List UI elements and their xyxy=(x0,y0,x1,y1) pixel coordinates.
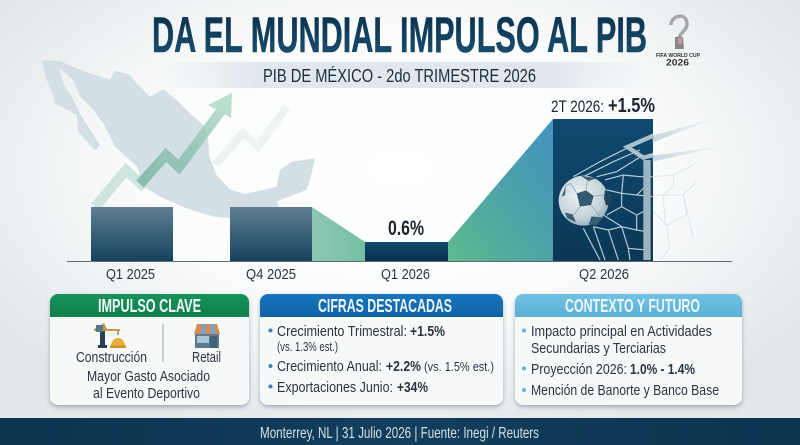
value 2T 2026 +1.5% xyxy=(551,95,655,117)
text: al evento deportivo: al Evento Deportivo xyxy=(93,385,200,402)
bullet: proyección 2026: 1.0% - 1.4% xyxy=(630,361,695,378)
bullet: crecimiento trimestral xyxy=(268,323,445,354)
footer xyxy=(0,418,800,445)
bullet: crecimiento anual: (vs. 1.5% est.) xyxy=(424,359,494,374)
bullet: exportaciones junio: Exportaciones Junio: xyxy=(277,379,393,396)
text: mayor gasto asociado: Mayor Gasto Asociado xyxy=(87,368,210,385)
map of Mexico xyxy=(42,61,315,218)
bullet: exportaciones junio: +34% xyxy=(397,379,428,396)
subtitle band xyxy=(160,62,650,88)
value 2T 2026 +1.5%: +1.5% xyxy=(608,95,655,117)
header: contexto y futuro: CONTEXTO Y FUTURO xyxy=(565,296,700,316)
label Q1 2026: Q1 2026 xyxy=(381,266,430,283)
panel: impulso clave xyxy=(50,294,249,405)
bullet: crecimiento trimestral: +1.5% xyxy=(410,323,445,340)
bar Q1 2026 xyxy=(365,242,448,261)
bullet: crecimiento anual xyxy=(268,358,494,375)
connector Q4 2025 to Q1 2026 xyxy=(312,207,365,261)
label Q2 2026: Q2 2026 xyxy=(579,266,629,283)
label Q4 2025: Q4 2025 xyxy=(246,266,296,283)
subtitle band: PIB DE MÉXICO - 2do TRIMESTRE 2026 xyxy=(263,66,536,86)
bullet: impacto principal: Secundarias y Terciarias xyxy=(531,340,666,357)
header: contexto y futuro xyxy=(515,294,742,317)
bar Q2 2026 xyxy=(553,119,653,261)
axis baseline xyxy=(67,261,732,262)
bullet: crecimiento anual: +2.2% xyxy=(386,358,421,375)
divider xyxy=(162,324,164,362)
FIFA World Cup 2026 logo: 2026 xyxy=(666,58,689,68)
faint growth line xyxy=(215,107,287,165)
bullet: impacto principal xyxy=(522,323,712,357)
goal net xyxy=(573,148,653,260)
goal rim xyxy=(627,136,653,158)
label: construcción: Construcción xyxy=(76,349,147,366)
bullet: mención de banorte: Mención de Banorte y Banco Base xyxy=(531,382,719,399)
crossbar streaks xyxy=(653,118,717,142)
header: impulso clave: IMPULSO CLAVE xyxy=(98,296,201,316)
bullet: crecimiento trimestral: (vs. 1.3% est.) xyxy=(277,339,338,354)
growth arrow xyxy=(140,93,232,184)
bullet: impacto principal: Impacto principal en Actividades xyxy=(531,323,712,340)
panel: contexto y futuro xyxy=(515,294,742,405)
panel: cifras destacadas xyxy=(260,294,503,405)
icon: retail store xyxy=(194,324,220,348)
soccer ball xyxy=(559,176,613,226)
bar Q1 2025 xyxy=(91,207,173,261)
faint net outside bar xyxy=(653,165,697,260)
bullet: proyección 2026: Proyección 2026: xyxy=(531,361,627,378)
goal net and ball xyxy=(559,118,720,260)
bullet: crecimiento trimestral: Crecimiento Trimestral: xyxy=(277,323,407,340)
label Q1 2025: Q1 2025 xyxy=(106,266,155,283)
goal post xyxy=(643,160,651,260)
bar Q4 2025 xyxy=(230,207,312,261)
pale growth line xyxy=(95,170,145,207)
connector Q1 2026 to Q2 2026 xyxy=(448,119,553,261)
icon: construction crane and helmet xyxy=(94,323,126,348)
label: retail: Retail xyxy=(192,349,221,366)
footer text: Monterrey, NL | 31 Julio 2026 | Fuente: Inegi / Reuters xyxy=(260,425,539,442)
value 2T 2026 +1.5%: 2T 2026: xyxy=(551,97,604,116)
bullet: crecimiento anual: Crecimiento Anual: xyxy=(277,358,382,375)
FIFA World Cup 2026 logo: FIFA WORLD CUP xyxy=(656,53,700,59)
value 0.6%: 0.6% xyxy=(388,217,424,240)
header: cifras destacadas xyxy=(260,294,503,317)
header: cifras destacadas: CIFRAS DESTACADAS xyxy=(318,296,452,316)
FIFA World Cup 2026 logo xyxy=(656,16,700,68)
bullet: proyección 2026 xyxy=(522,361,695,378)
header: impulso clave xyxy=(50,294,249,317)
